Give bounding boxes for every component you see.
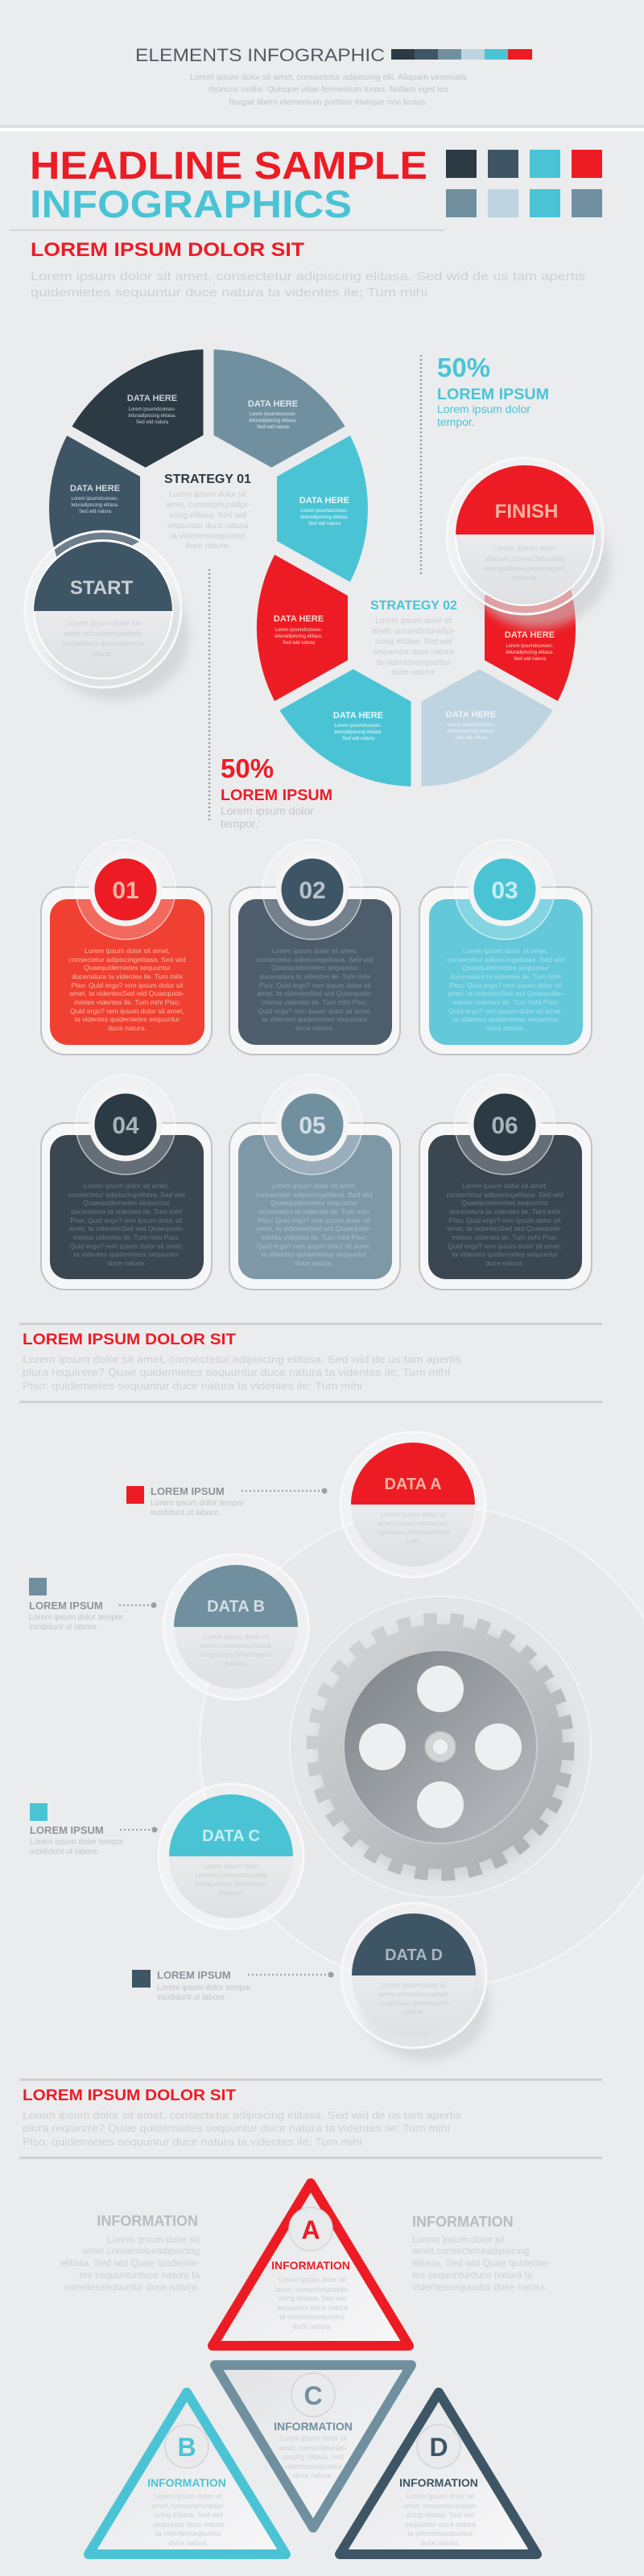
segment labels: DATA HERE (70, 484, 120, 493)
intro body text (31, 270, 585, 299)
callout: 50% red (209, 569, 332, 830)
triangle B: duce natura. (169, 2539, 208, 2547)
finish circle (447, 458, 610, 628)
card 06: Quaequidemietes sequuntur (461, 1199, 548, 1207)
triangle C: C (303, 2381, 323, 2410)
data circle B (163, 1554, 308, 1699)
legend C: LOREM IPSUM (30, 1824, 104, 1836)
triangle C: INFORMATION (274, 2420, 353, 2433)
section heading 1: LOREM IPSUM DOLOR SIT (31, 239, 304, 261)
card 03: duce natura. (486, 1024, 525, 1032)
data circle D (341, 1903, 489, 2061)
segment top-left (69, 349, 208, 470)
finish circle: Lorem ipsum dolor (493, 544, 556, 553)
data circle A (341, 1432, 485, 1577)
data circle A: DATA A (384, 1476, 442, 1493)
segment labels: DATA HERE (299, 496, 349, 506)
data circle C (159, 1784, 303, 1929)
segment left red (257, 550, 348, 706)
strategy 02 text (370, 599, 457, 677)
legend B (29, 1578, 156, 1632)
card 05: ta videntes quidemietes sequuntur (262, 1250, 367, 1258)
card 05: Lorem ipsum dolor sit amet, (271, 1182, 357, 1190)
card 03: amet, ta videntesSed wid Quaequide- (448, 989, 564, 997)
triangle B: B (177, 2433, 196, 2462)
intro body text: quidemietes sequuntur duce natura ta videntes ile; Tum mihi (31, 287, 427, 299)
card 05: amet, ta videntesSed wid Quaequide- (256, 1224, 372, 1232)
card 03: consectetur adipiscingelitasa. Sed wid (447, 956, 564, 964)
triangle D (340, 2392, 537, 2554)
card 05: ducenatura ta videntes ile. Tum mihi (258, 1208, 369, 1216)
card 06: ducenatura ta videntes ile. Tum mihi (449, 1208, 560, 1216)
legend D: LOREM IPSUM (157, 1969, 231, 1981)
card 04: Quaequidemietes sequuntur (83, 1199, 170, 1207)
segment labels: DATA HERE (248, 399, 298, 409)
card 06: Quid ergo? rem ipsum dolor sit amet, (448, 1242, 562, 1250)
card 06: 06 (491, 1113, 518, 1139)
strategy 01 text: scing elitasa. Sed wid (169, 511, 246, 520)
card 03: mietes videntes ile. Tum mihi Piso: (452, 998, 559, 1006)
numbered cards (41, 840, 592, 1290)
triangle B: INFORMATION (147, 2476, 226, 2489)
data circle C: tisplurar. (218, 1889, 244, 1897)
segment labels: Lorem ipsumdconsec- (249, 412, 297, 417)
card 01: amet, ta videntesSed wid Quaequide- (69, 989, 185, 997)
card 06: Lorem ipsum dolor sit amet, (462, 1182, 547, 1190)
card 02: 02 (299, 877, 326, 904)
card 04: consectetur adipiscingelitasa. Sed wid (68, 1191, 185, 1199)
segment labels: DATA HERE (505, 630, 555, 640)
triangle A (213, 2183, 409, 2346)
strategy ring 2 (257, 550, 576, 786)
colour squares grid (446, 150, 602, 217)
segment labels: Lorem ipsumdconsec- (128, 407, 176, 412)
card 04: ta videntes quidemietes sequuntur (74, 1250, 180, 1258)
card 02: ducenatura ta videntes ile. Tum mihi (259, 972, 370, 980)
callout: 50% red: Lorem ipsum dolor (221, 804, 314, 817)
legend A: incididunt ut labore. (151, 1509, 221, 1517)
segment labels: DATA HERE (274, 614, 324, 624)
strategy 02 text: STRATEGY 02 (370, 599, 457, 613)
triangle C: piscing elitasa. Sed (283, 2453, 344, 2461)
top title: elements infographic (135, 45, 532, 65)
data circle C: iscingelitasa.detamaper (195, 1880, 267, 1888)
strategy 02 text: amet, consecteturadipi- (372, 627, 456, 636)
data circle C: Lorem ipsum dolor (203, 1862, 259, 1870)
card 01: Quaequidemietes sequuntur (84, 964, 171, 972)
card 03: Quaequidemietes sequuntur (462, 964, 549, 972)
info text left: amet.consecteturadipiscing (83, 2245, 200, 2256)
data circle B: splurar. (225, 1659, 247, 1667)
segment labels: Sed wid natura (79, 510, 112, 514)
segment right (277, 431, 368, 587)
segment labels: Sed wid natura (308, 522, 341, 526)
section heading 3: Piso: quidemietes sequuntur duce natura ta videntes ile; Tum mihi (23, 2136, 362, 2148)
info text right: tes sequunturduce natura ta (412, 2269, 533, 2281)
info text right (412, 2214, 551, 2293)
card 04: duce natura. (107, 1259, 146, 1267)
gear background discs (200, 1506, 644, 1988)
section heading 3: Lorem ipsum dolor sit amet, consectetur adipiscing elitasa. Sed wid de us tam apertis (23, 2109, 462, 2121)
triangle D: duce natura. (421, 2539, 460, 2547)
card 05: 05 (299, 1113, 326, 1139)
card 03: Quid ergo? rem ipsum dolor sit amet, (448, 1007, 563, 1015)
triangle D: sequuntur duce natura (405, 2520, 476, 2529)
section heading 3: plura requirere? Quae quidemietes sequuntur duce natura ta videntes ile; Tum mihi (23, 2122, 450, 2134)
segment labels: Lorem ipsumdconsec- (71, 497, 119, 502)
callout: 50% cyan (421, 353, 549, 576)
segment top-right (208, 349, 348, 470)
info text left: tes sequunturduce natura ta (80, 2269, 200, 2281)
segment labels: DATA HERE (446, 710, 496, 720)
card 01: ta videntes quidemietes sequuntur (75, 1015, 180, 1023)
strategy 01 text: ta videntessequuntur (171, 532, 246, 541)
card 04: Piso: Quid ergo? rem ipsum dolor sit (71, 1216, 183, 1224)
legend A (126, 1485, 327, 1517)
segment labels: teturadipiscing elitasa. (128, 414, 176, 419)
segment labels: teturadipiscing elitasa. (300, 515, 349, 520)
top title: elements infographic: ELEMENTS INFOGRAPHIC (135, 45, 385, 65)
triangle C: duce natura. (294, 2471, 332, 2479)
section heading 2: Piso: quidemietes sequuntur duce natura ta videntes ile; Tum mihi (23, 1380, 362, 1392)
card 01: Lorem ipsum dolor sit amet, (85, 947, 170, 955)
headline: HEADLINE SAMPLE (30, 145, 427, 188)
card 02 (229, 840, 400, 1055)
legend C: Lorem ipsum dolor tempor (30, 1838, 124, 1847)
card 06: duce natura. (485, 1259, 524, 1267)
triangle D: Lorem ipsum dolor sit (407, 2492, 475, 2500)
segment labels: Sed wid natura (342, 737, 375, 741)
legend B: Lorem ipsum dolor tempor (29, 1613, 123, 1622)
triangle A: ta videntessequuntur (279, 2313, 345, 2321)
card 05: consectetur adipiscingelitasa. Sed wid (255, 1191, 373, 1199)
card 02: Quaequidemietes sequuntur (271, 964, 358, 972)
card 02: mietes videntes ile. Tum mihi Piso: (262, 998, 368, 1006)
triangle D: scing elitasa. Sed wid (407, 2511, 474, 2519)
triangle C (215, 2365, 411, 2528)
triangle B: scing elitasa. Sed wid (155, 2511, 222, 2519)
card 06: amet, ta videntesSed wid Quaequide- (447, 1224, 563, 1232)
segment bottom-right light (416, 667, 555, 786)
strategy 01 text: duce natura. (185, 542, 230, 551)
section heading 2: Lorem ipsum dolor sit amet, consectetur adipiscing elitasa. Sed wid de us tam apertis (23, 1353, 462, 1365)
segment labels: Lorem ipsumdconsec- (275, 628, 323, 633)
callout: 50% cyan: LOREM IPSUM (437, 386, 549, 403)
triangle C: Lorem ipsum dolor sit (279, 2434, 348, 2442)
card 03: 03 (491, 877, 518, 904)
strategy 02 text: scing elitasa. Sed wid (375, 638, 452, 646)
legend D: incididunt ut labore. (157, 1993, 227, 2002)
icon: gear (312, 1619, 572, 1879)
start circle: plurar. (93, 650, 114, 658)
segment labels: Sed wid natura (514, 657, 547, 662)
triangle A: Lorem ipsum dolor sit (279, 2276, 347, 2284)
card 02: Quid ergo? rem ipsum dolor sit amet, (258, 1007, 372, 1015)
section heading 3 (23, 2087, 462, 2148)
segment labels: DATA HERE (127, 394, 177, 403)
data circle D: amet.consecteturadipis (378, 1990, 449, 1998)
card 06: Piso: Quid ergo? rem ipsum dolor sit (449, 1216, 561, 1224)
callout: 50% cyan: tempor. (437, 415, 475, 428)
card 04: Quid ergo? rem ipsum dolor sit amet, (69, 1242, 184, 1250)
triangle B: ta videntessequuntur (155, 2529, 221, 2537)
info text left (60, 2213, 200, 2293)
data circle A: amet.consecteturadisci (378, 1519, 448, 1527)
strategy 02 text: Lorem ipsum dolor sit (375, 617, 452, 625)
segment labels: Sed wid natura (283, 641, 316, 646)
finish circle: sitamet.consecteturadip (485, 555, 565, 564)
section heading 3: LOREM IPSUM DOLOR SIT (23, 2087, 236, 2104)
card 03: ta videntes quidemietes sequuntur (453, 1015, 559, 1023)
data circle D: splurar. (402, 2008, 425, 2016)
info text right: elitasa. Sed wid Quae quidemie- (412, 2257, 551, 2268)
strategy 01 text: Lorem ipsum dolor sit (169, 490, 246, 499)
card 04: amet, ta videntesSed wid Quaequide- (68, 1224, 184, 1232)
callout: 50% cyan: 50% (437, 353, 490, 382)
segment left (49, 436, 140, 557)
top intro text: Lorem ipsum dolor sit amet, consectetur adipiscing elit. Aliquam venenatis (190, 72, 467, 82)
card 04 (41, 1075, 212, 1290)
data circle A: ngelitasa.detamapertisp (377, 1528, 449, 1536)
segment labels: teturadipiscing elitasa. (506, 650, 554, 655)
section heading 2: plura requirere? Quae quidemietes sequuntur duce natura ta videntes ile; Tum mihi (23, 1366, 450, 1378)
triangle A: scing elitasa. Sed wid (279, 2294, 346, 2302)
card 01: consectetur adipiscingelitasa. Sed wid (68, 956, 186, 964)
card 01: duce natura. (108, 1024, 147, 1032)
top intro text: feugiat libero elementum porttitor tristique non lectus. (229, 97, 427, 107)
segment labels: teturadipiscing elitasa. (334, 730, 382, 735)
legend A: LOREM IPSUM (151, 1485, 225, 1497)
data circle A: lurar. (406, 1537, 420, 1545)
triangle A: A (301, 2215, 320, 2244)
card 05: duce natura. (295, 1259, 333, 1267)
triangle D: amet, consecteturadipi- (403, 2502, 477, 2510)
card 03: Piso: Quid ergo? rem ipsum dolor sit (449, 981, 562, 989)
data circle D: cingelitasa.detamaperti (378, 1999, 449, 2007)
card 01: Piso: Quid ergo? rem ipsum dolor sit (71, 981, 184, 989)
legend A: Lorem ipsum dolor tempor (151, 1499, 245, 1508)
segment right red (485, 589, 576, 701)
triangle B: sequuntur duce natura (153, 2520, 224, 2529)
triangle A: sequuntur duce natura (277, 2304, 348, 2312)
finish circle: isplurar. (511, 574, 539, 583)
triangle D: D (429, 2433, 448, 2462)
callout: 50% red: 50% (221, 753, 274, 783)
callout: 50% red: LOREM IPSUM (221, 787, 332, 804)
card 05: Quid ergo? rem ipsum dolor sit amet, (257, 1242, 371, 1250)
card 04: Lorem ipsum dolor sit amet, (84, 1182, 169, 1190)
finish circle: FINISH (495, 501, 558, 522)
start circle: cingelitasa.detamapertis (62, 639, 144, 648)
data circle D: DATA D (385, 1946, 443, 1964)
card 01: mietes videntes ile. Tum mihi Piso: (74, 998, 180, 1006)
segment labels: DATA HERE (333, 711, 383, 720)
triangle C: amet, consecteturadi- (279, 2444, 347, 2452)
card 06 (419, 1075, 592, 1290)
card 05: Piso: Quid ergo? rem ipsum dolor sit (258, 1216, 370, 1224)
strategy 02 text: sequuntur duce natura (374, 648, 454, 657)
segment labels: teturadipiscing elitasa. (447, 729, 495, 734)
start circle: START (70, 577, 133, 599)
segment labels: Sed wid natura (136, 420, 169, 425)
start circle (25, 531, 189, 700)
segment labels: Lorem ipsumdconsec- (334, 724, 382, 729)
colour palette bar (391, 49, 532, 60)
triangle C: videntessequuntur (284, 2462, 342, 2471)
legend D (132, 1969, 333, 2002)
info text left: INFORMATION (97, 2213, 198, 2229)
info text left: elitasa. Sed wid Quae quidemie- (60, 2257, 200, 2268)
legend B: incididunt ut labore. (29, 1623, 99, 1632)
triangle A: amet, consecteturadipi- (275, 2285, 349, 2293)
callout: 50% red: tempor. (221, 817, 258, 830)
headline (30, 145, 427, 226)
segment labels: Sed wid natura (455, 736, 488, 741)
card 01: Quid ergo? rem ipsum dolor sit amet, (70, 1007, 184, 1015)
card 02: Lorem ipsum dolor sit amet, (272, 947, 357, 955)
segment labels: teturadipiscing elitasa. (249, 419, 297, 423)
info text right: videntessequuntur duce natura. (412, 2281, 547, 2293)
segment bottom-left cyan (277, 667, 416, 786)
segment labels: Lorem ipsumdconsec- (300, 509, 349, 514)
start circle: amet.consecteturadipis (64, 630, 142, 638)
card 02: consectetur adipiscingelitasa. Sed wid (256, 956, 374, 964)
data circle C: DATA C (202, 1827, 260, 1845)
data circle B: Lorem ipsum dolor sit (203, 1633, 269, 1641)
card 03: ducenatura ta videntes ile. Tum mihi (450, 972, 561, 980)
card 02: amet, ta videntesSed wid Quaequide- (257, 989, 373, 997)
strategy 02 text: duce natura. (391, 668, 436, 677)
triangle D: INFORMATION (399, 2476, 478, 2489)
section heading 2 (23, 1331, 462, 1392)
strategy ring 1 (49, 349, 368, 587)
card 05: Quaequidemietes sequuntur (270, 1199, 357, 1207)
triangle A: INFORMATION (271, 2259, 350, 2272)
info text right: amet.consecteturadipiscing (412, 2245, 529, 2256)
segment labels: teturadipiscing elitasa. (71, 503, 119, 508)
data circle B: DATA B (207, 1598, 265, 1616)
triangle A: duce natura. (293, 2322, 332, 2330)
section heading 1 (31, 239, 585, 299)
finish circle: iscingelitasa.detamapert (484, 564, 567, 573)
card 06: mietes videntes ile. Tum mihi Piso: (452, 1233, 558, 1241)
segment labels: Lorem ipsumdconsec- (506, 644, 554, 649)
card 03 (419, 840, 592, 1055)
strategy 01 text (164, 473, 251, 551)
data circle B: amet.consecteturadipis (200, 1641, 271, 1649)
headline: INFOGRAPHICS (30, 184, 352, 226)
start circle: Lorem ipsum dolor sit (67, 619, 140, 628)
card 03: Lorem ipsum dolor sit amet, (463, 947, 548, 955)
strategy 01 text: STRATEGY 01 (164, 473, 251, 486)
card 02: duce natura. (295, 1024, 334, 1032)
card 02: ta videntes quidemietes sequuntur (262, 1015, 368, 1023)
segment labels: teturadipiscing elitasa. (275, 634, 323, 639)
segment labels: Sed wid natura (257, 425, 290, 430)
strategy 02 text: ta videntessequuntur (377, 658, 452, 667)
info text right: INFORMATION (412, 2214, 514, 2230)
legend B: LOREM IPSUM (29, 1600, 103, 1612)
data circle A: Lorem ipsum dolor sit (380, 1510, 446, 1518)
segment labels: Lorem ipsumdconsec- (447, 723, 495, 728)
strategy 01 text: amet, consecteturadipi- (166, 501, 250, 510)
card 06: consectetur adipiscingelitasa. Sed wid (446, 1191, 564, 1199)
card 01: 01 (112, 877, 139, 904)
legend C: incididunt ut labore. (30, 1847, 100, 1856)
card 02: Piso: Quid ergo? rem ipsum dolor sit (259, 981, 371, 989)
section heading 2: LOREM IPSUM DOLOR SIT (23, 1331, 236, 1348)
top intro text (190, 72, 467, 107)
card 05: mietes videntes ile. Tum mihi Piso: (261, 1233, 367, 1241)
info text left: videntessequuntur duce natura. (64, 2281, 200, 2293)
data circle B: cingelitasa.detamaperti (200, 1650, 271, 1658)
strategy 01 text: sequuntur duce natura (167, 522, 248, 530)
card 01: ducenatura ta videntes ile. Tum mihi (72, 972, 183, 980)
legend D: Lorem ipsum dolor tempor (157, 1984, 251, 1992)
data circle D: Lorem ipsum dolor sit (381, 1981, 447, 1989)
card 04: 04 (112, 1113, 139, 1139)
info text left: Lorem ipsum dolor sit (107, 2234, 200, 2245)
legend C (30, 1803, 158, 1856)
top intro text: rhoncus mollis. Quisque vitae fermentum turpis. Nullam eget leo (208, 85, 448, 94)
card 04: mietes videntes ile. Tum mihi Piso: (73, 1233, 180, 1241)
triangle B (89, 2392, 286, 2554)
triangle D: ta videntessequuntur (407, 2529, 473, 2537)
card 05 (229, 1075, 400, 1290)
intro body text: Lorem ipsum dolor sit amet, consectetur adipiscing elitasa. Sed wid de us tam apertis (31, 270, 585, 283)
callout: 50% cyan: Lorem ipsum dolor (437, 402, 530, 415)
data circle C: sitamet.consecteturadip (195, 1871, 267, 1879)
card 06: ta videntes quidemietes sequuntur (452, 1250, 558, 1258)
triangle B: Lorem ipsum dolor sit (155, 2492, 223, 2500)
triangle B: amet, consecteturadipi- (151, 2502, 225, 2510)
segment labels (70, 394, 555, 741)
card 01 (41, 840, 212, 1055)
info text right: Lorem ipsum dolor sit (412, 2234, 505, 2245)
card 04: ducenatura ta videntes ile. Tum mihi (71, 1208, 182, 1216)
